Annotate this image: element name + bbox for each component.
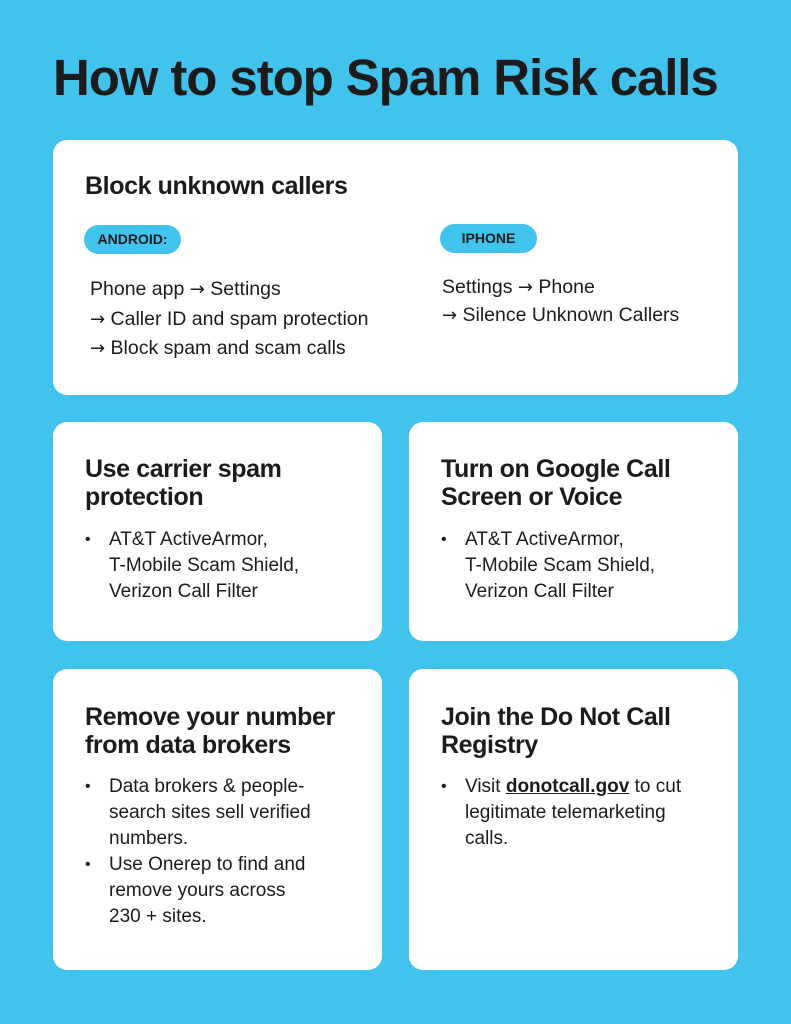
- panel: google call screen: [409, 422, 738, 641]
- bullet list: [442, 529, 655, 602]
- iphone steps: → Silence Unknown Callers: [442, 304, 679, 326]
- android steps: → Block spam and scam calls: [90, 337, 346, 359]
- bullet list: calls.: [465, 828, 508, 849]
- heading: Screen or Voice: [441, 483, 622, 511]
- pill: android: [84, 225, 181, 254]
- heading: [441, 455, 670, 511]
- android steps: → Caller ID and spam protection: [90, 308, 368, 330]
- heading: Join the Do Not Call: [441, 703, 671, 731]
- bullet list: Visit donotcall.gov to cut: [465, 776, 681, 797]
- panel: data brokers: [53, 669, 382, 970]
- android steps: Phone app → Settings: [90, 278, 281, 300]
- bullet list: Use Onerep to find and: [109, 854, 305, 875]
- bullet list: AT&T ActiveArmor,: [109, 529, 268, 550]
- android steps: [90, 278, 368, 359]
- iphone steps: [442, 276, 679, 326]
- heading: protection: [85, 483, 203, 511]
- heading: Remove your number: [85, 703, 335, 731]
- bullet list: Verizon Call Filter: [465, 581, 614, 602]
- heading: [441, 703, 671, 759]
- pill: iphone: [440, 224, 537, 253]
- heading: from data brokers: [85, 731, 291, 759]
- bullet list: numbers.: [109, 828, 188, 849]
- bullet list: Verizon Call Filter: [109, 581, 258, 602]
- panel: block unknown callers: [53, 140, 738, 395]
- panel: carrier spam protection: [53, 422, 382, 641]
- bullet list: [442, 776, 681, 849]
- bullet list: legitimate telemarketing: [465, 802, 666, 823]
- panel: do not call registry: [409, 669, 738, 970]
- title: How to stop Spam Risk calls: [53, 49, 718, 106]
- heading: Registry: [441, 731, 538, 759]
- bullet list: [86, 776, 311, 927]
- heading: [85, 455, 282, 511]
- bullet list: [86, 529, 299, 602]
- heading: block unknown callers: Block unknown callers: [85, 172, 348, 200]
- bullet list: T-Mobile Scam Shield,: [465, 555, 655, 576]
- heading: [85, 703, 335, 759]
- bullet list: Data brokers & people-: [109, 776, 304, 797]
- heading: Turn on Google Call: [441, 455, 670, 483]
- pill: android: ANDROID:: [98, 231, 168, 247]
- bullet list: AT&T ActiveArmor,: [465, 529, 624, 550]
- heading: Use carrier spam: [85, 455, 282, 483]
- bullet list: search sites sell verified: [109, 802, 311, 823]
- bullet list: 230 + sites.: [109, 906, 207, 927]
- iphone steps: Settings → Phone: [442, 276, 595, 298]
- bullet list: remove yours across: [109, 880, 285, 901]
- pill: iphone: IPHONE: [462, 230, 515, 246]
- bullet list: T-Mobile Scam Shield,: [109, 555, 299, 576]
